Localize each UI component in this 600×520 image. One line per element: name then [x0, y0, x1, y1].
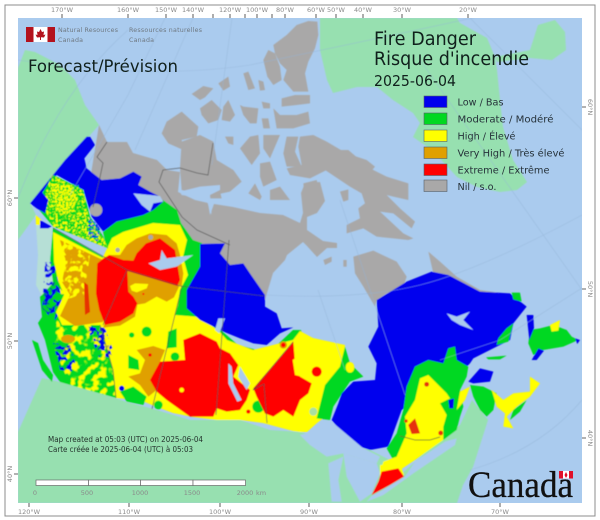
- northern mainland: [90, 125, 337, 300]
- BC orange north: [60, 240, 103, 326]
- Ontario green side band: [317, 347, 363, 420]
- bottom longitude labels: 110°W: [118, 508, 141, 516]
- Saskatchewan big red: [150, 333, 250, 417]
- scale bar labels: 0: [33, 489, 37, 497]
- scale bar labels: [33, 489, 266, 497]
- legend nil: Nil / s.o.: [458, 182, 496, 193]
- Prairie danger details: [119, 327, 312, 417]
- Reindeer lake: [215, 318, 225, 333]
- legend high: High / Élevé: [458, 130, 516, 142]
- Canada wordmark: [468, 465, 573, 506]
- Southern Ontario red: [372, 468, 404, 495]
- scale bar: [33, 480, 266, 497]
- top longitude labels: 160°W: [117, 6, 140, 14]
- Alberta red region: [96, 238, 180, 325]
- wordmark text: Canada: [468, 465, 573, 506]
- top longitude labels: 100°W: [246, 6, 269, 14]
- legend nil: [424, 180, 496, 193]
- Alberta south orange: [128, 346, 165, 397]
- Lake Michigan: [328, 457, 343, 502]
- Alberta yellow spot: [130, 283, 148, 292]
- Quebec yellow area: [380, 375, 450, 473]
- top longitude labels: 120°W: [219, 6, 242, 14]
- scale bar labels: 1500: [184, 489, 200, 497]
- Alberta green blobs: [142, 327, 152, 337]
- legend extreme: [424, 164, 550, 176]
- danger zone: yellow high prairies: [100, 223, 345, 432]
- legend: [424, 96, 564, 193]
- legend moderate: Moderate / Modéré: [458, 114, 554, 126]
- Gaspe yellow: [457, 387, 470, 410]
- Arctic islands: [90, 21, 517, 307]
- title block: [374, 29, 529, 90]
- British Columbia mixed zone: [32, 228, 116, 398]
- Lake Manitoba streak: [228, 363, 242, 402]
- Yellow dot in red: [179, 388, 184, 392]
- Newfoundland green: [528, 325, 578, 355]
- Ontario Quebec east danger layers: [309, 272, 580, 495]
- Quebec red blob large: [408, 418, 420, 434]
- BC red streak: [84, 282, 90, 315]
- Ontario red dot in yellow: [312, 367, 322, 377]
- legend high: [424, 130, 516, 142]
- BC blue noise west: [42, 262, 68, 320]
- left latitude labels: 60°N: [6, 190, 14, 206]
- Blue Ontario and Quebec: [332, 272, 527, 450]
- department country French: Canada: [129, 37, 154, 44]
- Quebec red blob small: [424, 382, 429, 387]
- left latitude labels: 50°N: [6, 333, 14, 349]
- scale bar labels: 500: [81, 489, 93, 497]
- Ontario yellow bump: [346, 362, 354, 373]
- Lake Winnipeg: [238, 367, 250, 390]
- Yukon blue south strip: [40, 220, 52, 228]
- BC green base: [38, 228, 116, 398]
- neighbouring land: Alaska: [18, 50, 99, 240]
- bottom longitude labels: 100°W: [209, 508, 232, 516]
- legend low: Low / Bas: [458, 98, 504, 108]
- Alberta orange south: [103, 271, 179, 328]
- legend very high: [424, 147, 564, 160]
- top longitude labels: 20°W: [459, 6, 478, 14]
- Newfoundland yellow: [550, 320, 560, 332]
- Alberta orange north ring: [108, 233, 183, 286]
- scale bar segments: [36, 480, 246, 486]
- Vancouver Island: [32, 340, 53, 382]
- department name English: Natural Resources: [58, 27, 118, 34]
- legend low: [424, 96, 504, 108]
- top longitude labels: 30°W: [393, 6, 412, 14]
- Sask green blob top: [167, 328, 177, 348]
- Quebec blue speck: [448, 398, 454, 408]
- Alberta green blob small: [129, 332, 134, 338]
- top longitude labels: 40°W: [354, 6, 373, 14]
- Newfoundland blue west: [527, 315, 534, 340]
- Red north-west Ontario: [253, 342, 312, 417]
- Yukon solid yellow core: [50, 183, 78, 215]
- left latitude labels: [6, 190, 14, 482]
- Manitoba red dot: [246, 410, 250, 414]
- Lakes Erie and Ontario: [367, 438, 457, 502]
- BC yellow noise south: [55, 320, 116, 398]
- Nova Scotia yellow: [492, 377, 540, 428]
- Yukon blue west strip: [30, 192, 48, 213]
- Lake Athabasca: [148, 250, 193, 270]
- top longitude labels: [51, 6, 478, 14]
- Nil circle: [90, 204, 102, 216]
- creation note English: Map created at 05:03 (UTC) on 2025-06-04: [48, 435, 203, 444]
- Green patch south Alberta line: [154, 401, 163, 409]
- wordmark flag: [559, 471, 573, 478]
- Yukon yellow noise: [42, 175, 108, 248]
- bottom longitude labels: 80°W: [393, 508, 412, 516]
- Yukon green base: [35, 175, 108, 248]
- BC yellow fringe: [53, 232, 103, 325]
- BC blue noise south a: [88, 325, 114, 360]
- Nil dot north: [115, 248, 120, 252]
- bottom longitude labels: 90°W: [300, 508, 319, 516]
- Newfoundland blue south: [532, 348, 544, 360]
- Hudson Bay islands: [323, 257, 347, 267]
- BC small orange spot: [61, 335, 75, 343]
- Central Quebec green noise: [497, 323, 513, 345]
- map creation note: [48, 435, 203, 454]
- Orange ringed red dot: [280, 342, 286, 348]
- bottom longitude labels: 120°W: [18, 508, 41, 516]
- Yukon small yellow tip: [36, 215, 42, 225]
- Alberta green side patch: [128, 355, 139, 370]
- title English: Fire Danger: [374, 29, 476, 50]
- title French: Risque d'incendie: [374, 49, 529, 70]
- Sask green blob mid: [171, 352, 179, 361]
- bottom longitude labels: [18, 508, 510, 516]
- date: 2025-06-04: [374, 72, 456, 90]
- Blue mountain spots: [119, 386, 124, 391]
- neighbouring land: United States: [18, 378, 488, 503]
- Banks and Victoria Islands: [162, 112, 242, 197]
- Quebec red dot west: [404, 419, 408, 423]
- Southern Ontario yellow fringe: [380, 463, 404, 487]
- Yukon blue south specks: [88, 217, 100, 242]
- Yukon and Northwest mixed zone: [30, 175, 108, 248]
- Quebec green area: [387, 347, 468, 460]
- neighbouring land: Greenland: [320, 18, 527, 192]
- top longitude labels: 140°W: [182, 6, 205, 14]
- scale bar labels: km: [256, 489, 266, 497]
- forecast heading: Forecast/Prévision: [28, 57, 178, 77]
- danger zone: blue low north-west: [30, 137, 163, 232]
- New Brunswick green: [470, 385, 497, 417]
- island group north: [192, 21, 375, 200]
- creation note French: Carte créée le 2025-06-04 (UTC) à 05:03: [48, 444, 193, 454]
- Lake Huron: [343, 453, 380, 502]
- danger zone: blue low Manitoba: [187, 243, 293, 345]
- Yellow notch in red Ontario: [293, 355, 302, 377]
- top longitude labels: 170°W: [51, 6, 74, 14]
- top longitude labels: 80°W: [276, 6, 295, 14]
- US Canada border trace in Quebec: [400, 436, 440, 440]
- Anticosti Island: [486, 356, 507, 359]
- right latitude labels: 40°N: [586, 430, 594, 446]
- Northeast green tip: [512, 293, 522, 302]
- scale bar labels: 2000: [237, 489, 253, 497]
- Alberta green patch south: [120, 387, 147, 405]
- Central Quebec lakes: [447, 312, 473, 330]
- department name French: Ressources naturelles: [129, 27, 202, 34]
- right latitude labels: 60°N: [586, 99, 594, 115]
- Gaspe blue: [468, 368, 493, 383]
- provincial borders: [53, 142, 293, 423]
- Lake Superior: [300, 422, 380, 463]
- lakes: [133, 193, 473, 502]
- legend moderate: [424, 113, 554, 126]
- top longitude labels: 60°W: [307, 6, 326, 14]
- government logo: [26, 27, 202, 44]
- scale bar labels: 1000: [132, 489, 148, 497]
- Manitoba green patch: [252, 401, 264, 413]
- Yukon green flecks: [48, 180, 83, 223]
- Nil dot top: [148, 235, 153, 240]
- NW interior channel: [180, 185, 220, 215]
- bottom longitude labels: 70°W: [491, 508, 510, 516]
- Newfoundland blue east tip: [575, 338, 580, 344]
- neighbouring land: Iceland: [495, 20, 566, 62]
- neighbouring land: Alaska panhandle: [36, 225, 54, 296]
- top longitude labels: 150°W: [155, 6, 178, 14]
- BC blue noise south b: [53, 343, 78, 372]
- BC yellow noise over orange: [53, 235, 90, 300]
- Red dot east Alberta: [142, 293, 144, 295]
- Baffin Island south and northern Quebec: [326, 150, 499, 306]
- icon: Canadian flag: [26, 27, 55, 42]
- top longitude labels: 50°W: [327, 6, 346, 14]
- danger zone: green moderate belt: [102, 200, 302, 351]
- right latitude labels: 50°N: [586, 281, 594, 297]
- Red dot in orange: [148, 353, 152, 357]
- left latitude labels: 40°N: [6, 466, 14, 482]
- right latitude labels: [586, 99, 594, 446]
- Ontario yellow lobe: [309, 408, 317, 416]
- Nova Scotia green: [510, 400, 527, 420]
- department country English: Canada: [58, 37, 83, 44]
- Alberta and north Saskatchewan danger zones: [96, 233, 193, 328]
- legend very high: Very High / Très élevé: [458, 148, 564, 160]
- Quebec red blob east: [438, 431, 443, 435]
- Great Bear and north lakes: [133, 193, 163, 212]
- legend extreme: Extreme / Extrême: [458, 164, 550, 176]
